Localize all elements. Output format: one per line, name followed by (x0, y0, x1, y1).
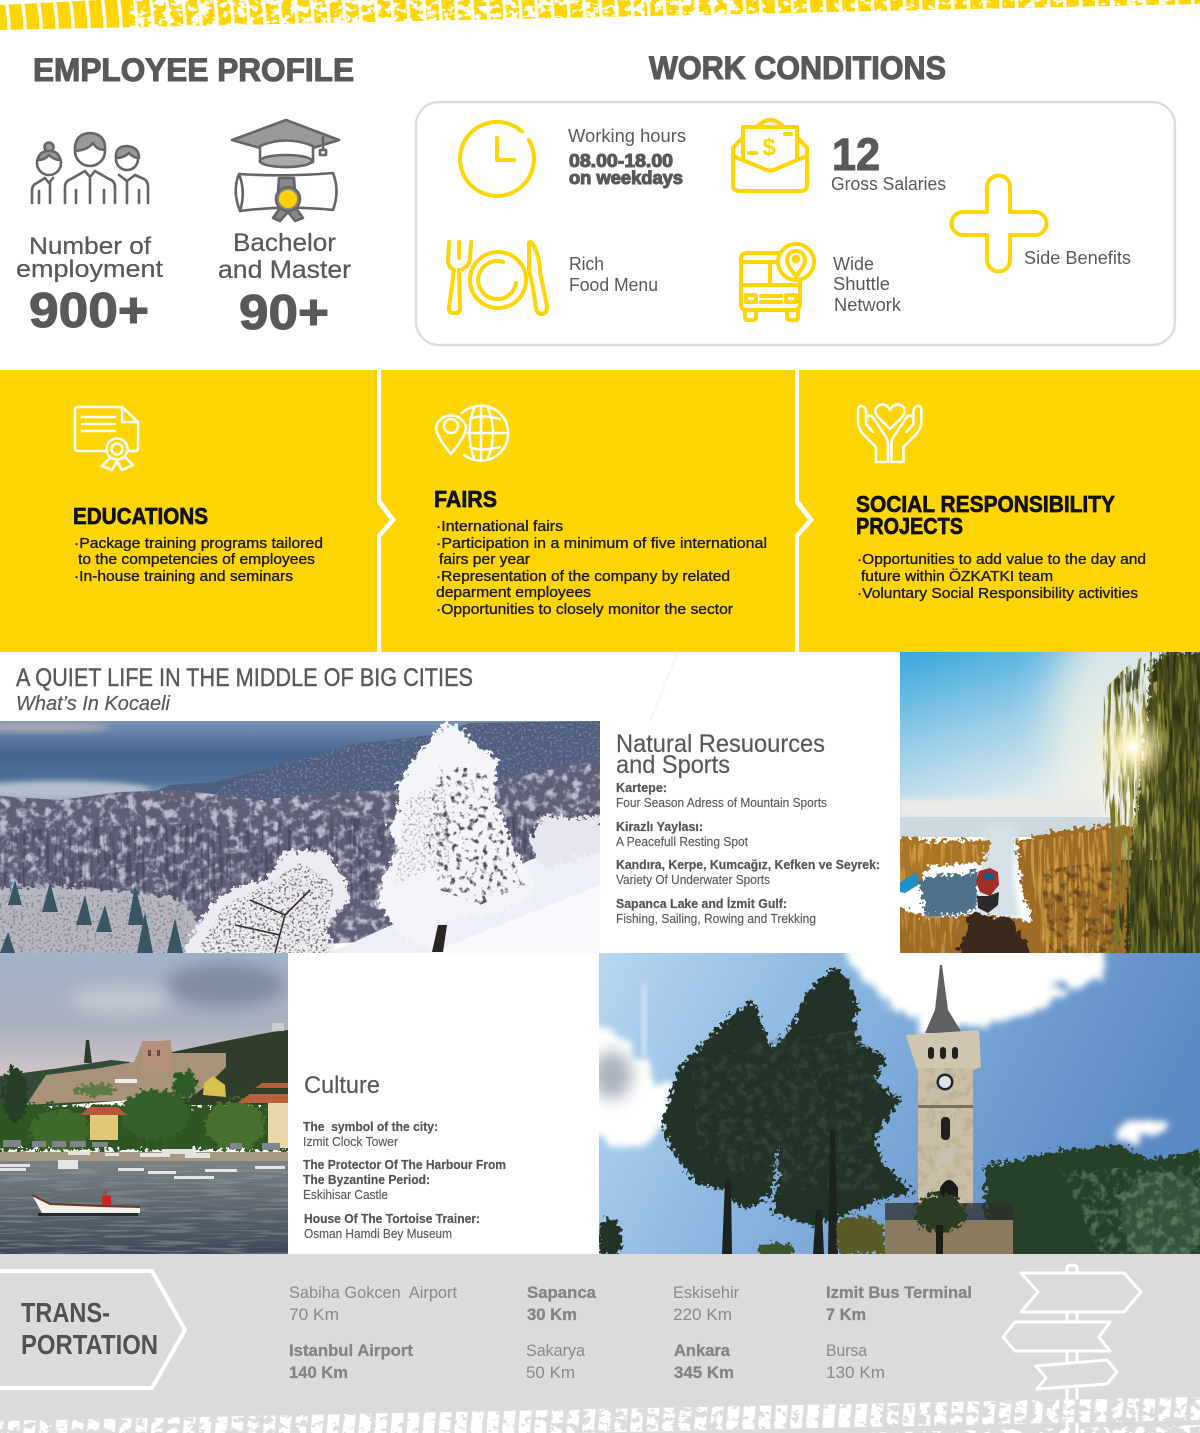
text: natural resources and sports: Natural Resuources (616, 730, 825, 758)
heading: transportation: TRANS- (21, 1297, 110, 1328)
text: natural resources and sports: Kirazlı Yaylası: (616, 820, 703, 834)
icon: graduation cap and diploma (232, 120, 339, 221)
block: educations: to the competencies of employees (78, 551, 315, 568)
text: natural resources and sports: Kartepe: (616, 781, 667, 795)
text: gross salaries: Gross Salaries (831, 174, 946, 194)
heading: transportation (21, 1297, 158, 1360)
block: social responsibility projects: ·Voluntary Social Responsibility activities (857, 585, 1138, 602)
stat: number of employment: employment (16, 256, 163, 283)
text: culture: House Of The Tortoise Trainer: (304, 1212, 480, 1226)
heading: quiet life banner: A QUIET LIFE IN THE MIDDLE OF BIG CITIES (16, 664, 473, 692)
block: social responsibility projects (856, 491, 1146, 602)
text: working hours: on weekdays (569, 168, 683, 188)
icon: certificate (75, 407, 138, 470)
block: fairs: ·International fairs (436, 518, 563, 535)
text: culture: Izmit Clock Tower (303, 1135, 398, 1149)
distances: eskisehir and ankara column: 220 Km (673, 1306, 732, 1324)
divider arrow 2 (795, 370, 814, 652)
heading: employee profile: EMPLOYEE PROFILE (33, 52, 354, 88)
text: natural resources and sports: Sapanca Lake and İzmit Gulf: (616, 896, 787, 911)
panel: yellow benefits strip (0, 370, 1200, 652)
icon: shuttle bus with pin (741, 244, 814, 320)
block: fairs: ·Opportunities to closely monitor the sector (436, 601, 733, 618)
photo: lake with reeds, boat and willow (900, 652, 1200, 953)
text: culture: Culture (304, 1072, 380, 1099)
icon: signpost (1003, 1265, 1141, 1433)
text: culture: The Protector Of The Harbour From (303, 1158, 506, 1172)
heading: quiet life banner (16, 664, 473, 715)
block: fairs: ·Participation in a minimum of five international (436, 535, 767, 552)
panel: transportation strip (0, 1254, 1200, 1433)
icon: hands holding heart (858, 404, 921, 462)
text: working hours: 08.00-18.00 (569, 151, 673, 171)
icon: plus sign (952, 176, 1046, 272)
banner shape edge (650, 652, 678, 721)
text: wide shuttle network (833, 254, 902, 315)
arrow: transportation label outline (0, 1271, 185, 1388)
text: culture (303, 1072, 506, 1241)
icon: three people (32, 133, 148, 203)
text: culture: Eskihisar Castle (303, 1188, 388, 1202)
panel: work conditions (416, 102, 1175, 345)
block: educations: ·Package training programs tailored (74, 535, 323, 552)
stat: bachelor and master (218, 229, 351, 340)
text: culture: Osman Hamdi Bey Museum (304, 1227, 452, 1241)
block: educations: EDUCATIONS (73, 503, 208, 529)
text: rich food menu: Rich (569, 254, 604, 274)
distances: sapanca and sakarya column: Sapanca (527, 1284, 597, 1302)
distances: sapanca and sakarya column: Sakarya (526, 1342, 586, 1360)
distances: eskisehir and ankara column: 345 Km (674, 1364, 734, 1382)
text: gross salaries: 12 (832, 129, 880, 180)
distances: airports column (289, 1284, 457, 1382)
icon: plate and cutlery (448, 242, 547, 314)
block: social responsibility projects: PROJECTS (856, 513, 963, 539)
distances: sapanca and sakarya column (526, 1284, 597, 1382)
heading: quiet life banner: What’s In Kocaeli (16, 693, 171, 715)
distances: eskisehir and ankara column: Eskisehir (673, 1284, 739, 1302)
heading: work conditions: WORK CONDITIONS (649, 50, 946, 86)
block: social responsibility projects: ·Opportunities to add value to the day and (857, 551, 1146, 568)
icon: salary envelope (733, 120, 807, 191)
distances: airports column: 140 Km (289, 1364, 348, 1382)
distances: sapanca and sakarya column: 50 Km (526, 1364, 575, 1382)
block: social responsibility projects: SOCIAL RESPONSIBILITY (856, 491, 1115, 517)
tyre track band: bottom (0, 1396, 1200, 1433)
block: fairs: deparment employees (436, 584, 591, 601)
stat: bachelor and master: 90+ (239, 286, 329, 340)
text: natural resources and sports: Four Season Adress of Mountain Sports (616, 796, 827, 810)
text: working hours: Working hours (568, 126, 686, 146)
text: wide shuttle network: Network (834, 295, 902, 315)
panel: employee profile stats (16, 120, 351, 340)
text: natural resources and sports: and Sports (616, 751, 730, 779)
block: fairs: ·Representation of the company by related (436, 568, 730, 585)
text: natural resources and sports: Kandıra, Kerpe, Kumcağız, Kefken ve Seyrek: (616, 858, 880, 872)
text: working hours (568, 126, 686, 188)
stat: number of employment (16, 233, 163, 338)
distances: bus terminal and bursa column: 130 Km (826, 1364, 885, 1382)
text: rich food menu: Food Menu (569, 275, 658, 295)
distances: bus terminal and bursa column: 7 Km (826, 1306, 866, 1324)
block: social responsibility projects: future within ÖZKATKI team (861, 567, 1053, 585)
stat: number of employment: 900+ (29, 284, 149, 338)
block: educations (73, 503, 323, 585)
block: educations: ·In-house training and seminars (74, 568, 293, 585)
text: natural resources and sports: Fishing, Sailing, Rowing and Trekking (616, 912, 816, 926)
distances: bus terminal and bursa column: Bursa (826, 1342, 868, 1360)
photo: izmit clock tower and trees (590, 945, 1200, 1265)
block: fairs: FAIRS (434, 486, 497, 512)
stat: bachelor and master: and Master (218, 256, 351, 284)
stat: bachelor and master: Bachelor (233, 229, 336, 257)
text: side benefits: Side Benefits (1024, 248, 1131, 268)
distances: bus terminal and bursa column (826, 1284, 972, 1382)
stat: number of employment: Number of (29, 233, 151, 260)
distances: airports column: Sabiha Gokcen Airport (289, 1284, 457, 1302)
icon: salary envelope: $ (762, 134, 776, 161)
text: culture: The symbol of the city: (303, 1120, 438, 1134)
text: natural resources and sports: A Peacefull Resting Spot (616, 835, 748, 849)
text: rich food menu (569, 254, 658, 295)
block: fairs (434, 486, 767, 618)
block: fairs: fairs per year (439, 551, 530, 568)
heading: transportation: PORTATION (21, 1329, 158, 1360)
distances: bus terminal and bursa column: Izmit Bus Terminal (826, 1284, 972, 1302)
text: culture: The Byzantine Period: (303, 1173, 430, 1187)
tyre track fragment: bottom right (850, 1425, 1200, 1433)
distances: airports column: Istanbul Airport (289, 1342, 413, 1360)
icon: globe and location pin (436, 406, 508, 461)
text: natural resources and sports (616, 730, 880, 926)
distances: airports column: 70 Km (289, 1306, 339, 1324)
photo: snowy forest and big tree (0, 721, 605, 965)
photo: harbour and castle (0, 953, 294, 1254)
distances: sapanca and sakarya column: 30 Km (527, 1306, 577, 1324)
text: gross salaries (831, 129, 946, 194)
tyre track band: top (0, 0, 1200, 32)
text: natural resources and sports: Variety Of Underwater Sports (616, 873, 770, 887)
divider arrow 1 (377, 370, 396, 652)
text: wide shuttle network: Shuttle (833, 274, 890, 294)
icon: clock (460, 122, 534, 196)
distances: eskisehir and ankara column (673, 1284, 739, 1382)
distances: eskisehir and ankara column: Ankara (674, 1342, 731, 1360)
text: wide shuttle network: Wide (833, 254, 874, 274)
